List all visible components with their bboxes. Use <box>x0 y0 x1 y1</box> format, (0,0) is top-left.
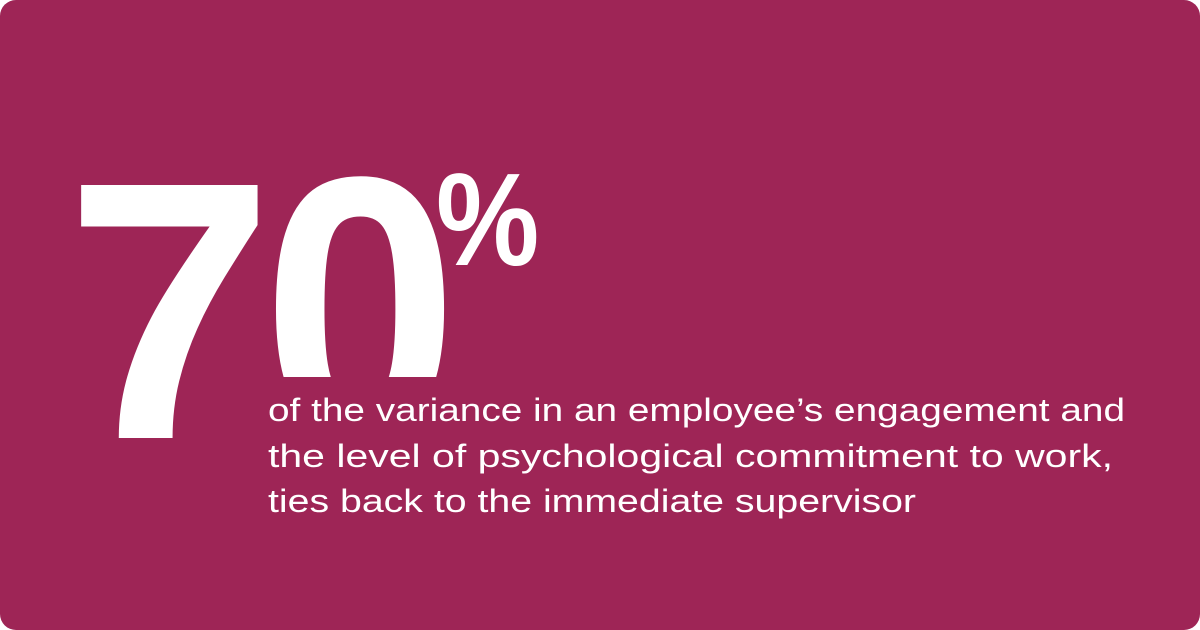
text block: description: the level of psychological commitment to work, <box>268 438 1113 474</box>
text block: description: ties back to the immediate supervisor <box>268 483 916 519</box>
big number 70%: 0 <box>262 99 459 518</box>
text block: description <box>268 392 1125 519</box>
big number 70%: % <box>436 146 539 294</box>
text block: description: of the variance in an employee’s engagement and <box>268 392 1125 428</box>
big number 70% <box>81 173 536 438</box>
big number 70%: 7 <box>65 105 274 516</box>
